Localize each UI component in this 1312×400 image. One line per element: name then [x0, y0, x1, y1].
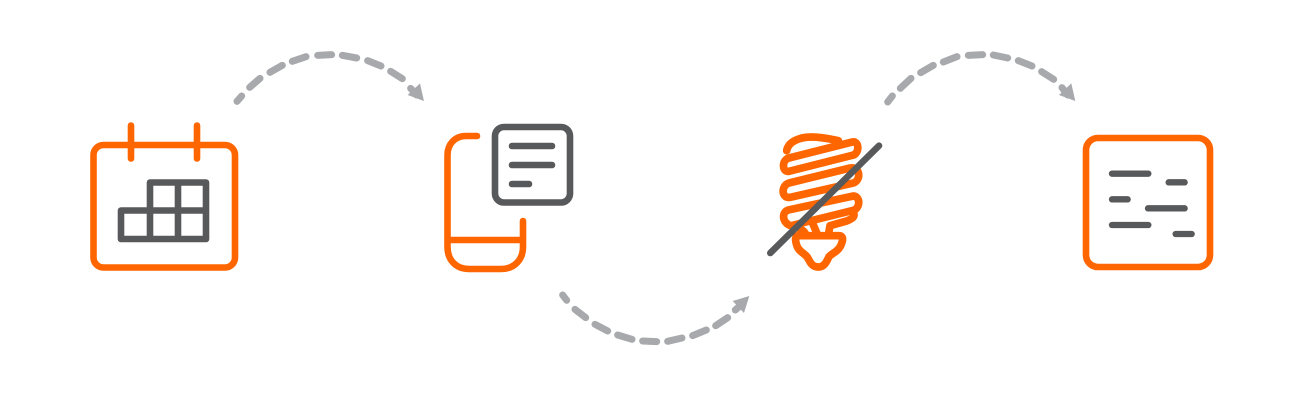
dashed curve	[563, 295, 728, 342]
icon: calendar with grid	[94, 126, 235, 268]
icon: phone with note	[448, 127, 570, 269]
dashed curve	[237, 55, 402, 101]
calendar binding ticks	[131, 126, 197, 158]
dashed curve	[888, 55, 1054, 102]
arrowhead	[408, 83, 424, 101]
note card	[495, 127, 570, 202]
slash	[770, 146, 879, 253]
arrow: phone to bulb	[563, 295, 749, 342]
calendar grid	[121, 182, 206, 239]
calendar frame	[94, 145, 235, 268]
arrow: calendar to phone	[237, 55, 424, 101]
note lines	[512, 146, 552, 184]
icon: crossed-out bulb	[770, 137, 879, 267]
bulb spiral lower and neck	[784, 196, 859, 235]
chart frame	[1086, 138, 1210, 267]
arrowhead	[733, 296, 749, 313]
arrowhead	[1059, 83, 1075, 101]
arrow: bulb to chart	[888, 55, 1075, 102]
gantt bars	[1112, 174, 1192, 234]
icon: gantt chart	[1086, 138, 1210, 267]
bulb spiral upper	[783, 137, 859, 197]
phone outline	[448, 136, 523, 269]
bulb base	[796, 236, 843, 267]
